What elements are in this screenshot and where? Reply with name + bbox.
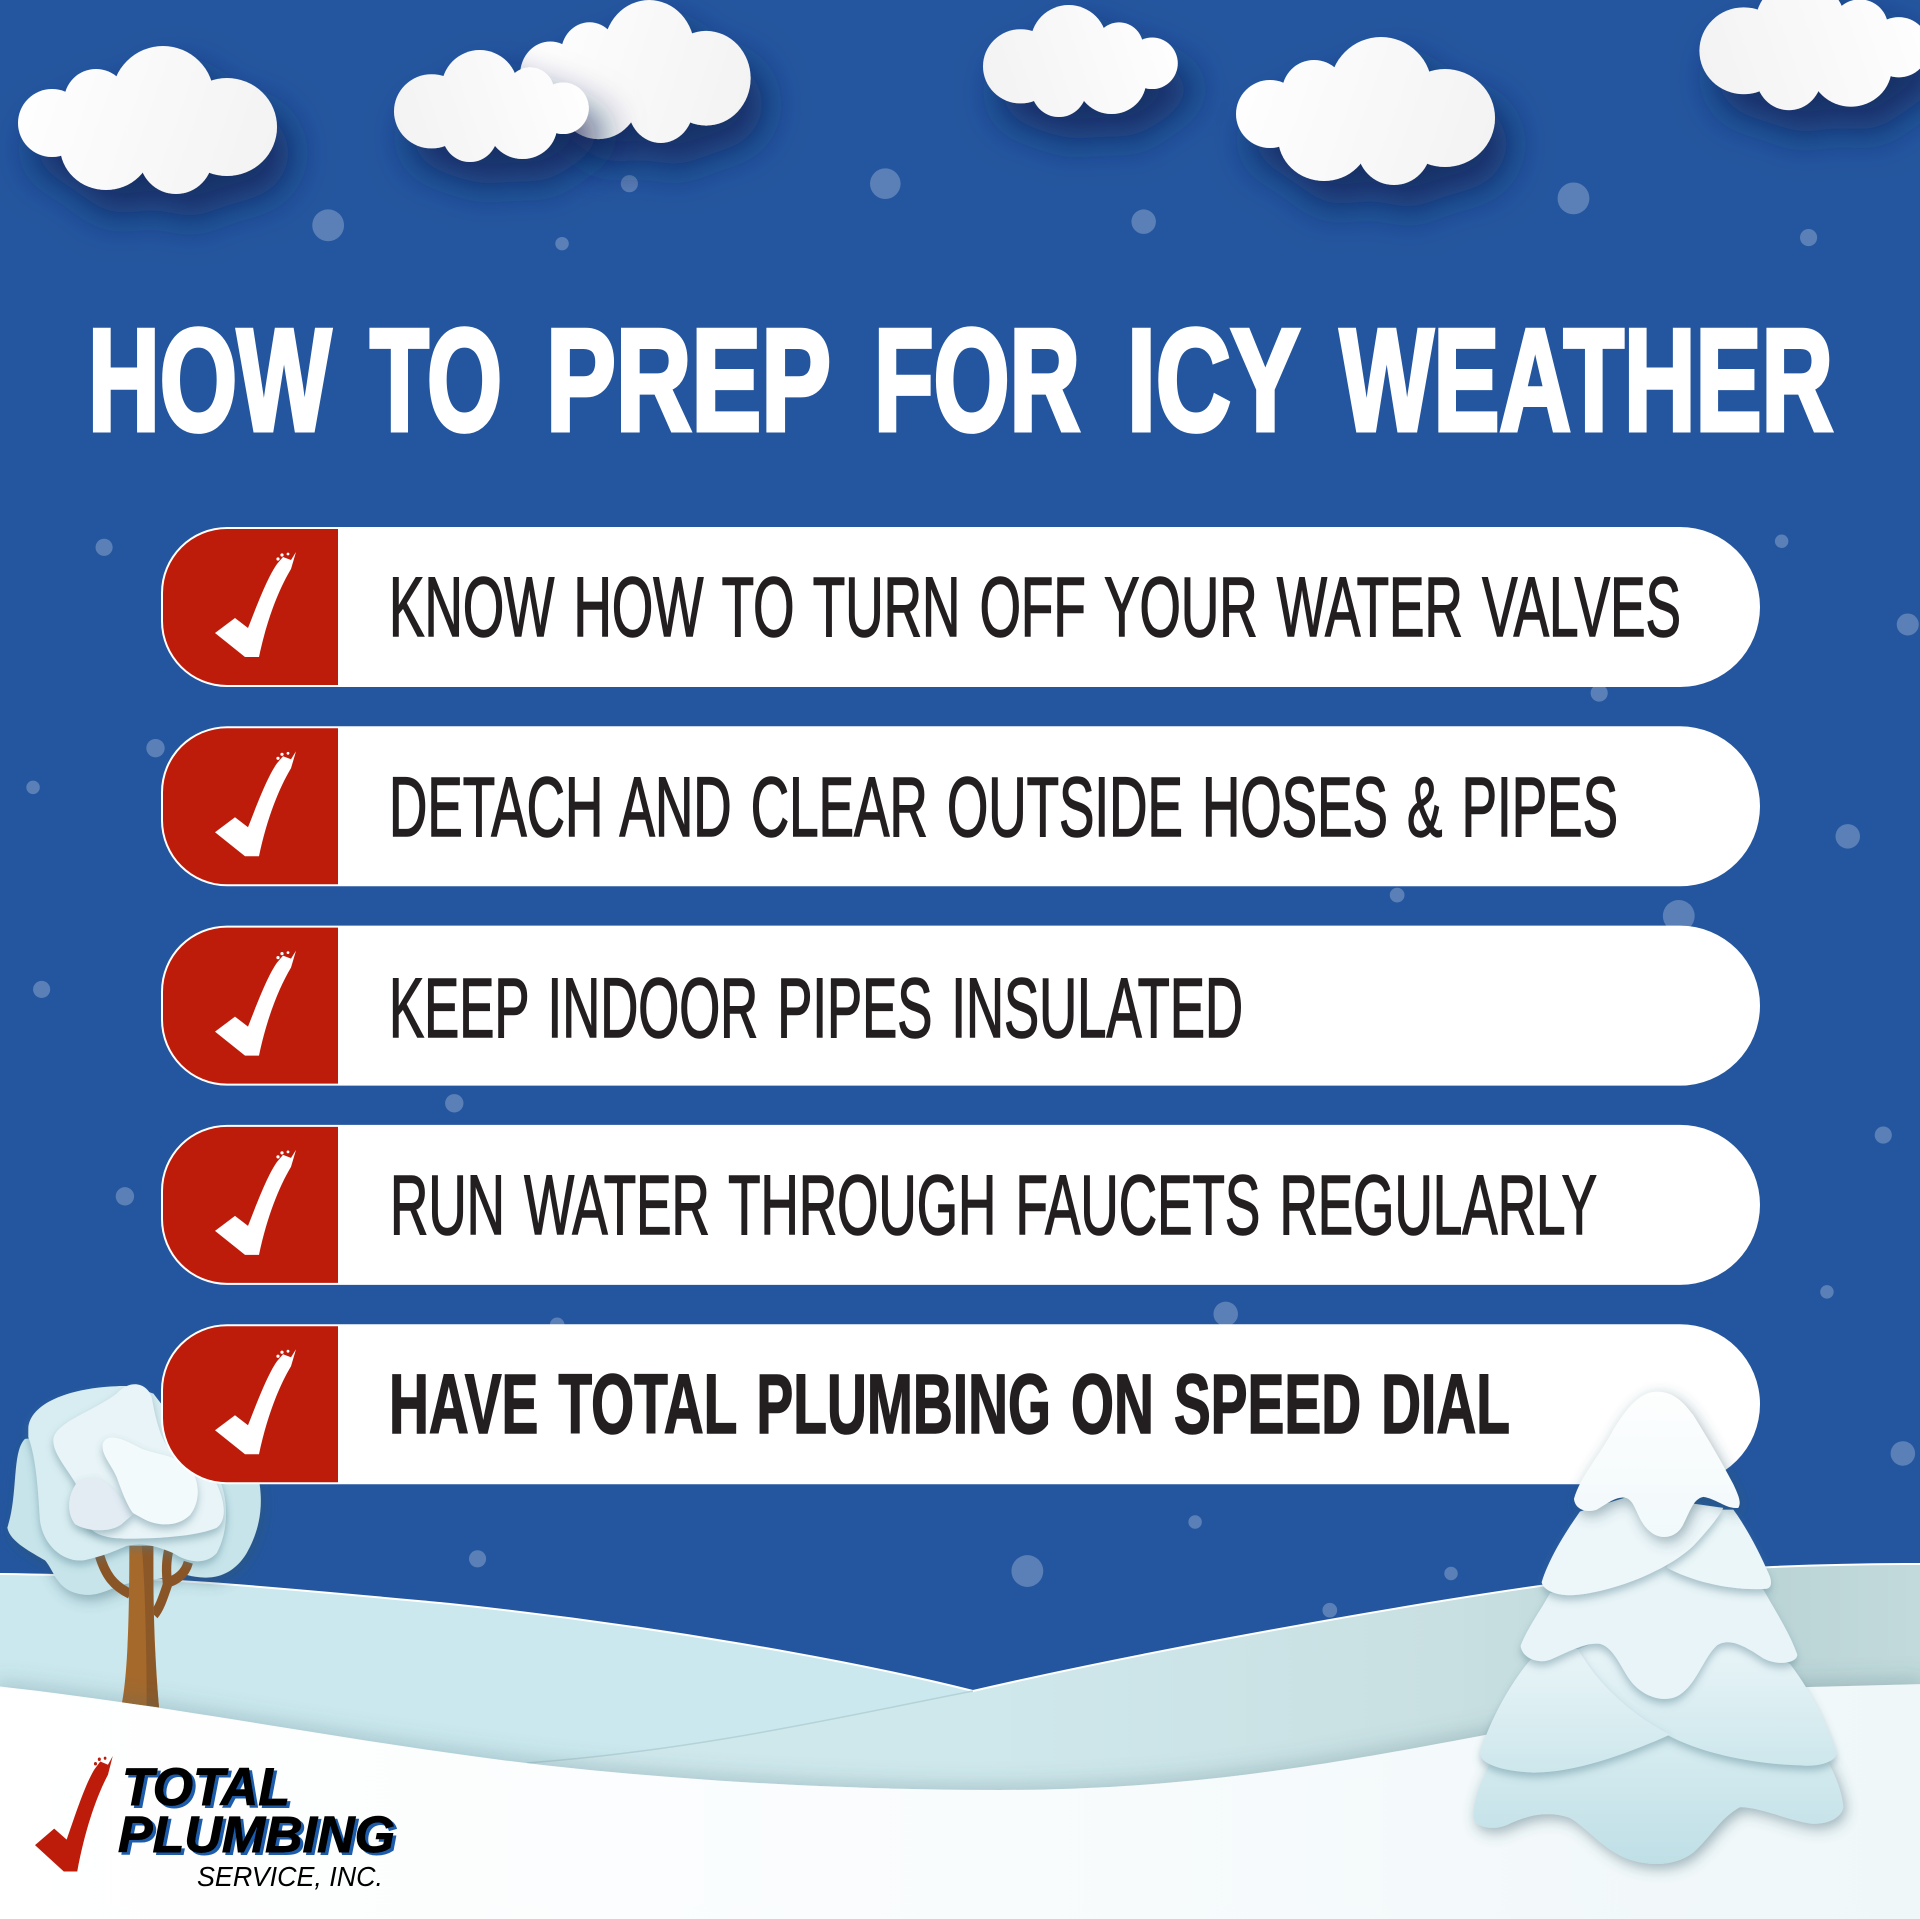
- snowfall dots: [26, 168, 1919, 1618]
- hill: back right crest: [527, 1691, 973, 1763]
- tree trunk: [122, 1546, 159, 1707]
- pine upper tier: [1521, 1564, 1797, 1699]
- tree foliage upper layer: [53, 1384, 224, 1539]
- pine small tier right: [1667, 1510, 1771, 1589]
- hill: back left: [0, 1574, 1100, 1800]
- cloud: large centre right: [1236, 37, 1495, 185]
- logo wordmark SERVICE: SERVICE, INC.: [197, 1861, 383, 1892]
- checklist row 5: [161, 1324, 1760, 1484]
- hill: back right upper crest: [973, 1564, 1920, 1691]
- hill: back right: [527, 1564, 1920, 1800]
- tree foliage top layer: [103, 1437, 198, 1524]
- row 5 check icon: [215, 1349, 296, 1454]
- pine bottom tier: [1473, 1735, 1843, 1864]
- title: TO: [370, 299, 502, 461]
- row 1 check icon: [215, 552, 296, 657]
- row 3 label: KEEP INDOOR PIPES INSULATED: [389, 961, 1243, 1055]
- row 1 red tab: [163, 529, 338, 685]
- row 2 check icon: [215, 751, 296, 856]
- pine tier left: [1480, 1647, 1670, 1773]
- cloud: back of pair: [520, 0, 751, 143]
- snow foreground: [0, 1684, 1920, 1919]
- tree foliage grey layer: [69, 1477, 133, 1530]
- title: PREP: [546, 299, 831, 461]
- title: HOW: [88, 299, 331, 461]
- row 5 red tab: [163, 1326, 338, 1482]
- row 2 pill: [161, 726, 1760, 886]
- pine snow cap: [1574, 1392, 1740, 1537]
- tree foliage back layer: [7, 1423, 261, 1595]
- title: [88, 299, 1833, 461]
- title: FOR: [874, 299, 1080, 461]
- company logo: [35, 1756, 395, 1892]
- tree foliage middle layer: [28, 1386, 226, 1561]
- row 4 pill: [161, 1125, 1760, 1285]
- row 3 red tab: [163, 928, 338, 1084]
- logo wordmark PLUMBING: PLUMBING: [118, 1806, 395, 1863]
- logo wordmark TOTAL: TOTAL: [122, 1758, 290, 1817]
- checklist row 4: [161, 1125, 1760, 1285]
- row 4 check icon: [215, 1150, 296, 1255]
- tree trunk shading: [142, 1546, 159, 1707]
- row 4 red tab: [163, 1127, 338, 1283]
- checklist row 1: [161, 527, 1760, 687]
- row 3 check icon: [215, 951, 296, 1056]
- row 5 pill: [161, 1324, 1760, 1484]
- tree branches: [99, 1548, 188, 1615]
- left tree: [7, 1384, 261, 1707]
- right pine tree: [1473, 1392, 1843, 1864]
- pine small tier left: [1542, 1495, 1723, 1595]
- row 3 pill: [161, 926, 1760, 1086]
- cloud: top right: [1699, 0, 1920, 110]
- cloud: front of pair: [394, 50, 589, 162]
- cloud: far left: [18, 46, 277, 194]
- cloud: small centre: [983, 5, 1178, 117]
- title: ICY: [1127, 299, 1300, 461]
- pine tier right: [1578, 1640, 1837, 1766]
- checklist row 2: [161, 726, 1760, 886]
- logo check mark: [35, 1756, 113, 1872]
- row 1 pill: [161, 527, 1760, 687]
- row 2 red tab: [163, 728, 338, 884]
- checklist row 3: [161, 926, 1760, 1086]
